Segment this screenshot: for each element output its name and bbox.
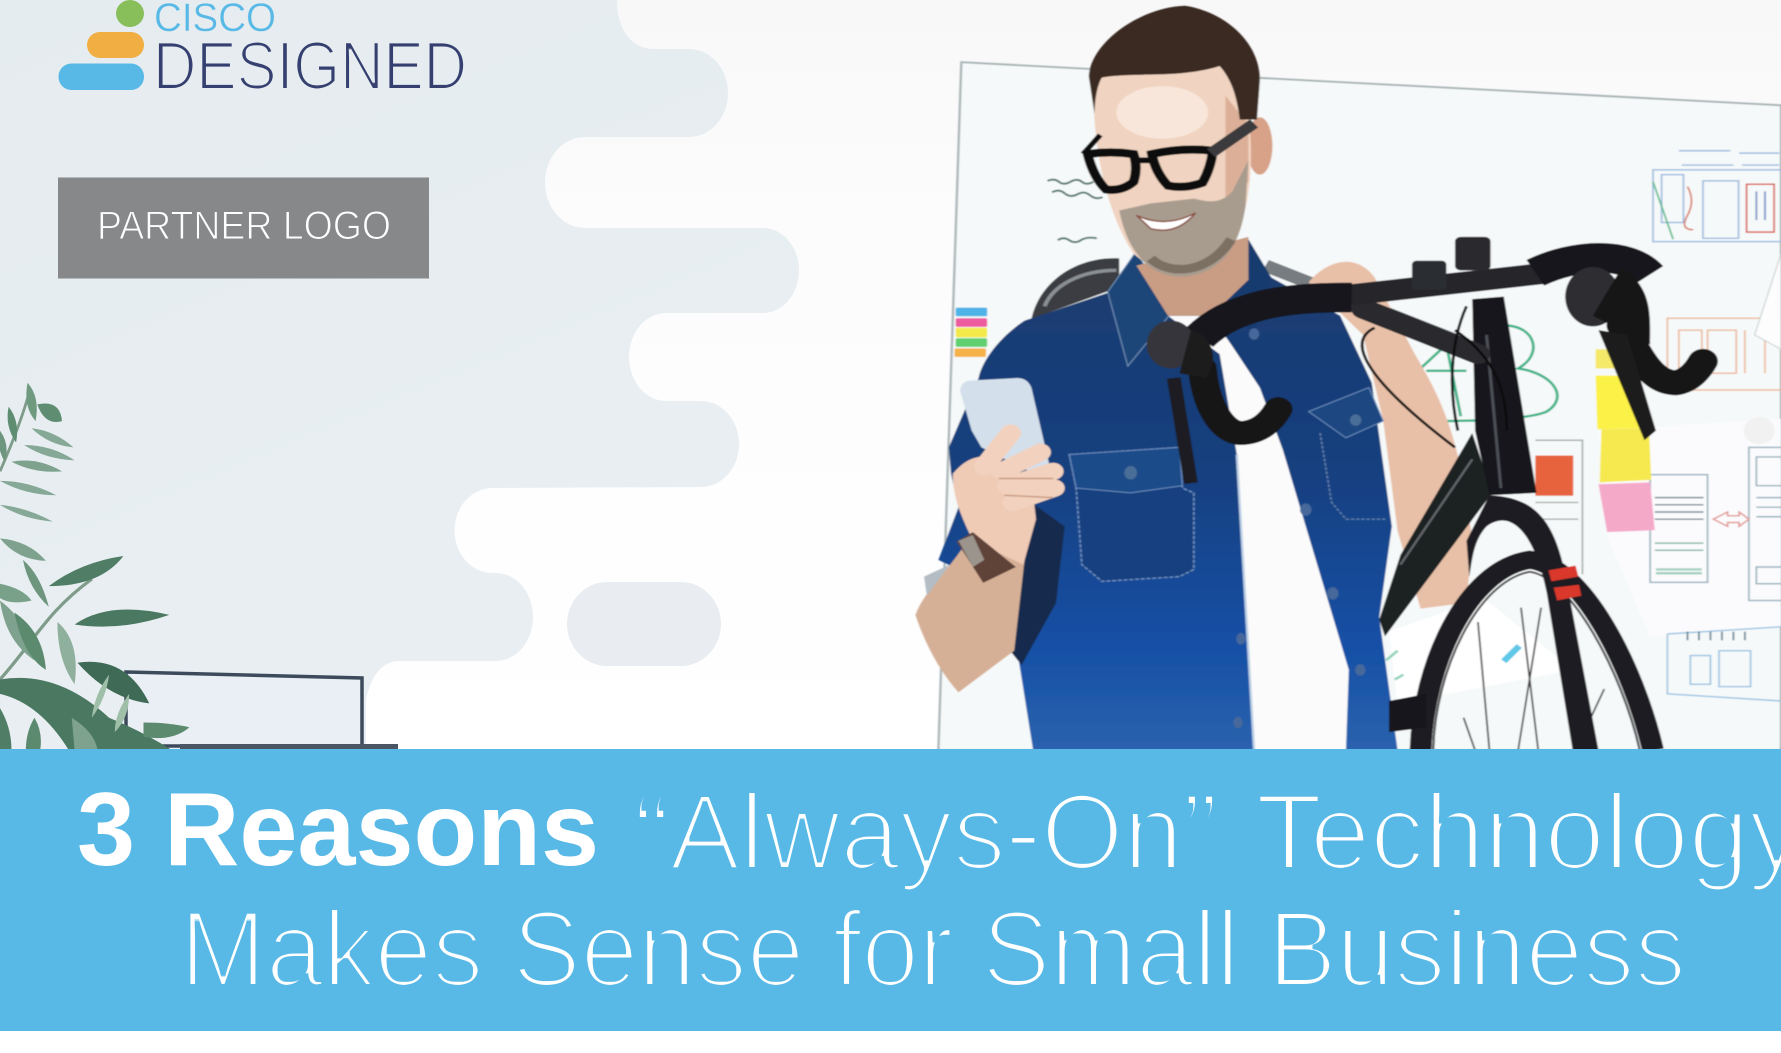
green AB doodle (1421, 325, 1557, 421)
rolled sleeve shadow (1010, 498, 1065, 665)
neck (1136, 237, 1248, 316)
chainstay stub (1389, 694, 1426, 732)
cables (1362, 306, 1507, 447)
left drop (1202, 368, 1278, 433)
head tube (1472, 297, 1537, 495)
top tube behind arm (1266, 266, 1466, 345)
buttons (1233, 328, 1365, 728)
partner logo placeholder (58, 178, 429, 278)
floating pill shape (567, 582, 721, 666)
cheek shadow (1225, 96, 1248, 201)
partner logo placeholder: PARTNER LOGO (97, 204, 391, 248)
photo: man with bicycle (915, 6, 1781, 750)
denim shirt (938, 239, 1398, 750)
banner: title (0, 749, 1781, 1031)
near arm (915, 541, 1024, 692)
right hood (1565, 267, 1620, 326)
wordmark: DESIGNED: DESIGNED (153, 28, 467, 104)
wristwatch (957, 532, 1016, 583)
right drop (1621, 325, 1703, 383)
squiggles (1047, 180, 1103, 242)
right pocket (1309, 388, 1383, 438)
title line 2: Makes Sense for Small Business (180, 888, 1686, 1009)
phone (960, 377, 1050, 471)
right lever (1598, 330, 1656, 440)
spokes (1464, 608, 1604, 750)
bike tyre behind shoulder (1031, 258, 1119, 320)
bicycle (1147, 237, 1703, 750)
wavy white shape (366, 0, 1781, 749)
white t-shirt (1168, 316, 1349, 750)
face (1093, 57, 1251, 273)
paper wireframes (1650, 447, 1781, 601)
collars (1108, 251, 1171, 366)
hand (953, 433, 1054, 565)
smile (1136, 213, 1196, 230)
hair (1089, 6, 1260, 120)
left bar tape (1200, 298, 1352, 337)
ear (1247, 117, 1272, 175)
wheel (1421, 560, 1653, 750)
front fork (1466, 495, 1598, 750)
right bar tape (1535, 258, 1649, 275)
title line 1: “Always-On” (634, 771, 1218, 892)
left hood and lever (1147, 321, 1195, 368)
panel: hero photo background (0, 0, 1781, 750)
shelf edge (180, 744, 398, 749)
icon: plant (0, 383, 189, 750)
logo: Cisco Designed (58, 0, 467, 104)
handlebar centre (1334, 274, 1541, 297)
sketch behind bike (1535, 440, 1582, 574)
wireframe sketches (1653, 151, 1781, 242)
forehead highlight (1116, 86, 1208, 139)
sticky notes (1535, 349, 1655, 532)
picture frame on shelf (126, 672, 362, 746)
sticky tabs (954, 308, 987, 357)
title line 1 (77, 771, 1781, 892)
chest pocket (1069, 447, 1194, 581)
glasses (1083, 123, 1254, 190)
title line 1: 3 Reasons (77, 772, 599, 888)
beard (1119, 160, 1248, 277)
hanging paper (1778, 418, 1781, 627)
far arm (1309, 262, 1472, 609)
lower board paper (1390, 602, 1559, 698)
icon: stacked shapes (58, 0, 144, 90)
top tube (1363, 309, 1478, 354)
down tube (1379, 433, 1492, 636)
whiteboard (938, 62, 1781, 750)
